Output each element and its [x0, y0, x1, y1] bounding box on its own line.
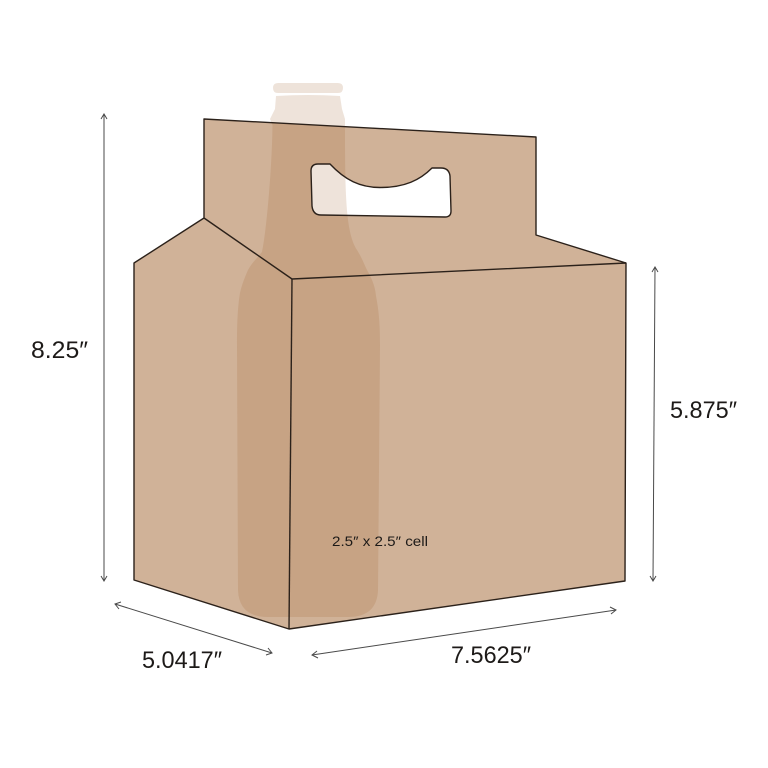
front corner edge — [289, 279, 292, 629]
arrow: total height — [101, 114, 107, 581]
carrier body fill — [134, 119, 626, 629]
arrow: body height — [650, 267, 658, 581]
label: depth: 5.0417″ — [142, 647, 222, 674]
label: total height: 8.25″ — [31, 337, 88, 364]
translucent bottle — [237, 83, 380, 617]
arrow: width — [312, 607, 616, 658]
label: body height: 5.875″ — [670, 397, 737, 424]
outer outline — [134, 119, 626, 629]
carrier box — [134, 119, 626, 629]
carrier outlines — [134, 119, 626, 629]
label: width: 7.5625″ — [451, 642, 531, 669]
label: cell size: 2.5″ x 2.5″ cell — [332, 534, 428, 549]
handle cutout outline — [311, 164, 451, 217]
arrow: depth — [115, 602, 272, 655]
